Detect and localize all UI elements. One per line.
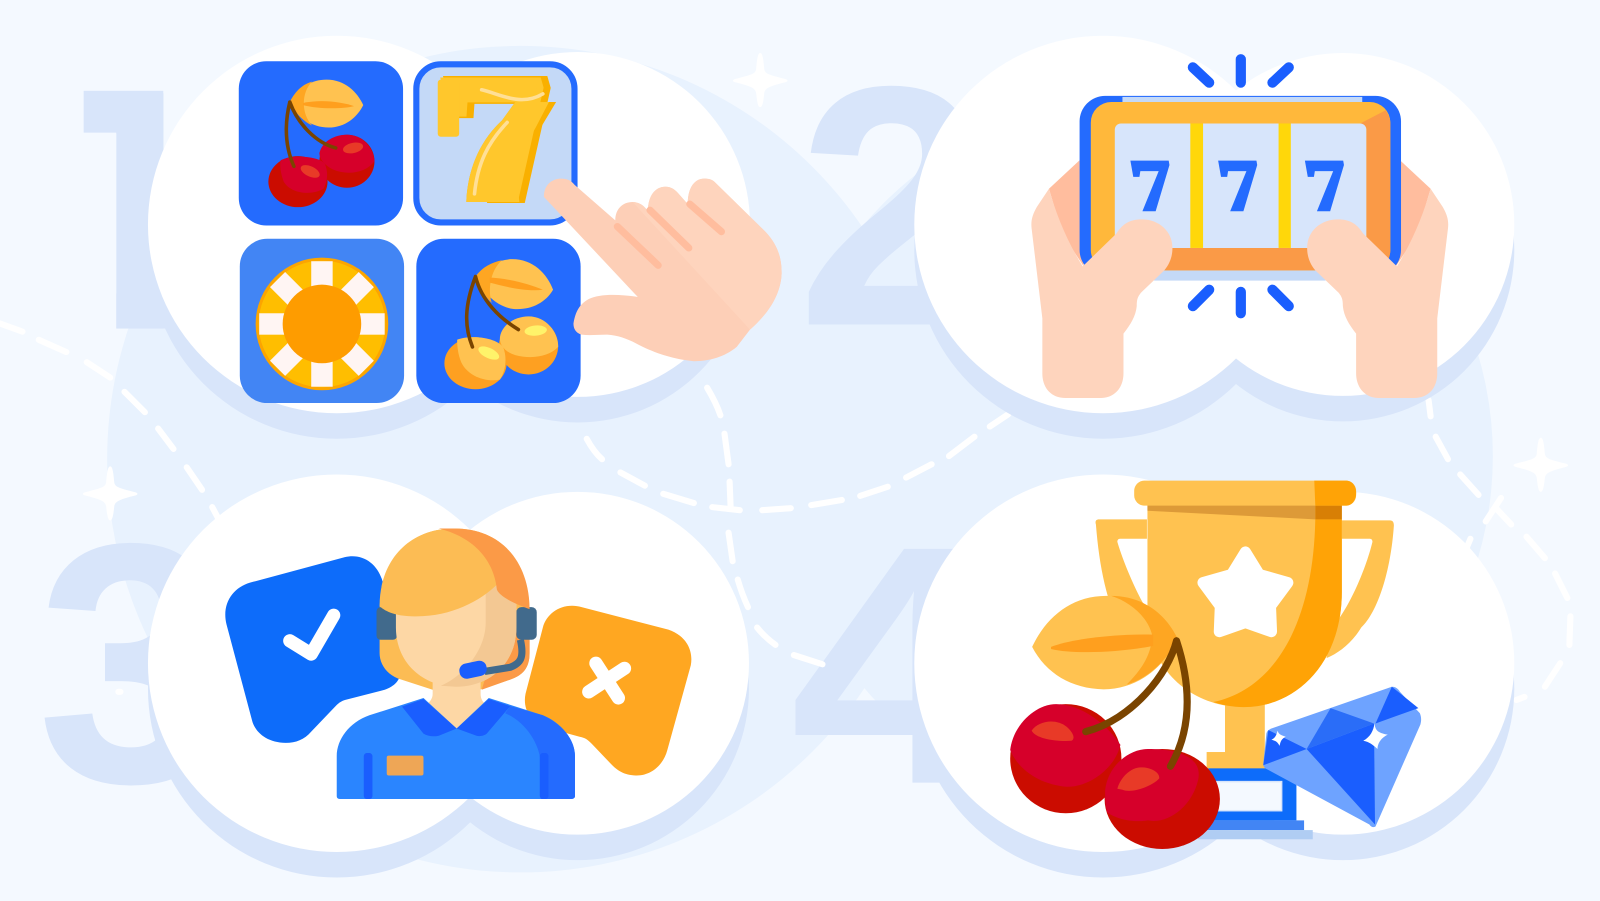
cloud 1	[148, 36, 750, 439]
tile: golden cherries	[416, 239, 581, 403]
panel: step 4 trophy and prizes	[914, 474, 1514, 878]
icon: holding hands	[1031, 189, 1448, 398]
panel: step 1 slot tiles	[148, 36, 782, 439]
icon: large cherries and leaf	[1010, 596, 1220, 849]
tile: golden seven: 7	[424, 37, 594, 238]
numeral 1	[84, 90, 165, 328]
numeral 1: 1	[37, 21, 227, 402]
numeral 3: 3	[37, 474, 227, 855]
icon: slot machine	[1080, 96, 1401, 281]
sparkle top centre	[733, 53, 788, 107]
tile: golden seven: 7	[419, 37, 589, 238]
reel digits: 7	[1124, 146, 1181, 227]
icon: agent	[337, 529, 575, 799]
icon: trophy	[1096, 481, 1394, 839]
sparkle left	[83, 466, 138, 520]
icon: cross bubble	[525, 606, 691, 775]
numeral 4: 4	[790, 475, 1000, 855]
reel digits: 7	[1299, 146, 1355, 227]
panel: step 2 slot machine in hands	[914, 36, 1514, 439]
reel digits	[1124, 146, 1355, 227]
cloud 3	[148, 474, 749, 878]
tile: red cherries	[239, 61, 403, 226]
cloud 2	[914, 36, 1514, 439]
cloud 4	[914, 474, 1514, 878]
numeral 2: 2	[797, 16, 987, 397]
icon: pointing hand	[544, 179, 782, 361]
sparkle right	[1514, 438, 1568, 492]
icon: sparkle ticks	[1193, 59, 1289, 313]
icon: hand shadows	[1049, 160, 1431, 266]
icon: check bubble	[225, 556, 401, 743]
reel digits: 7	[1212, 146, 1269, 227]
tile: casino chip	[240, 239, 404, 403]
panel: step 3 support agent	[148, 474, 749, 878]
background blob	[107, 46, 1493, 872]
icon: diamond	[1263, 687, 1421, 827]
dashed path lines	[0, 323, 1570, 700]
